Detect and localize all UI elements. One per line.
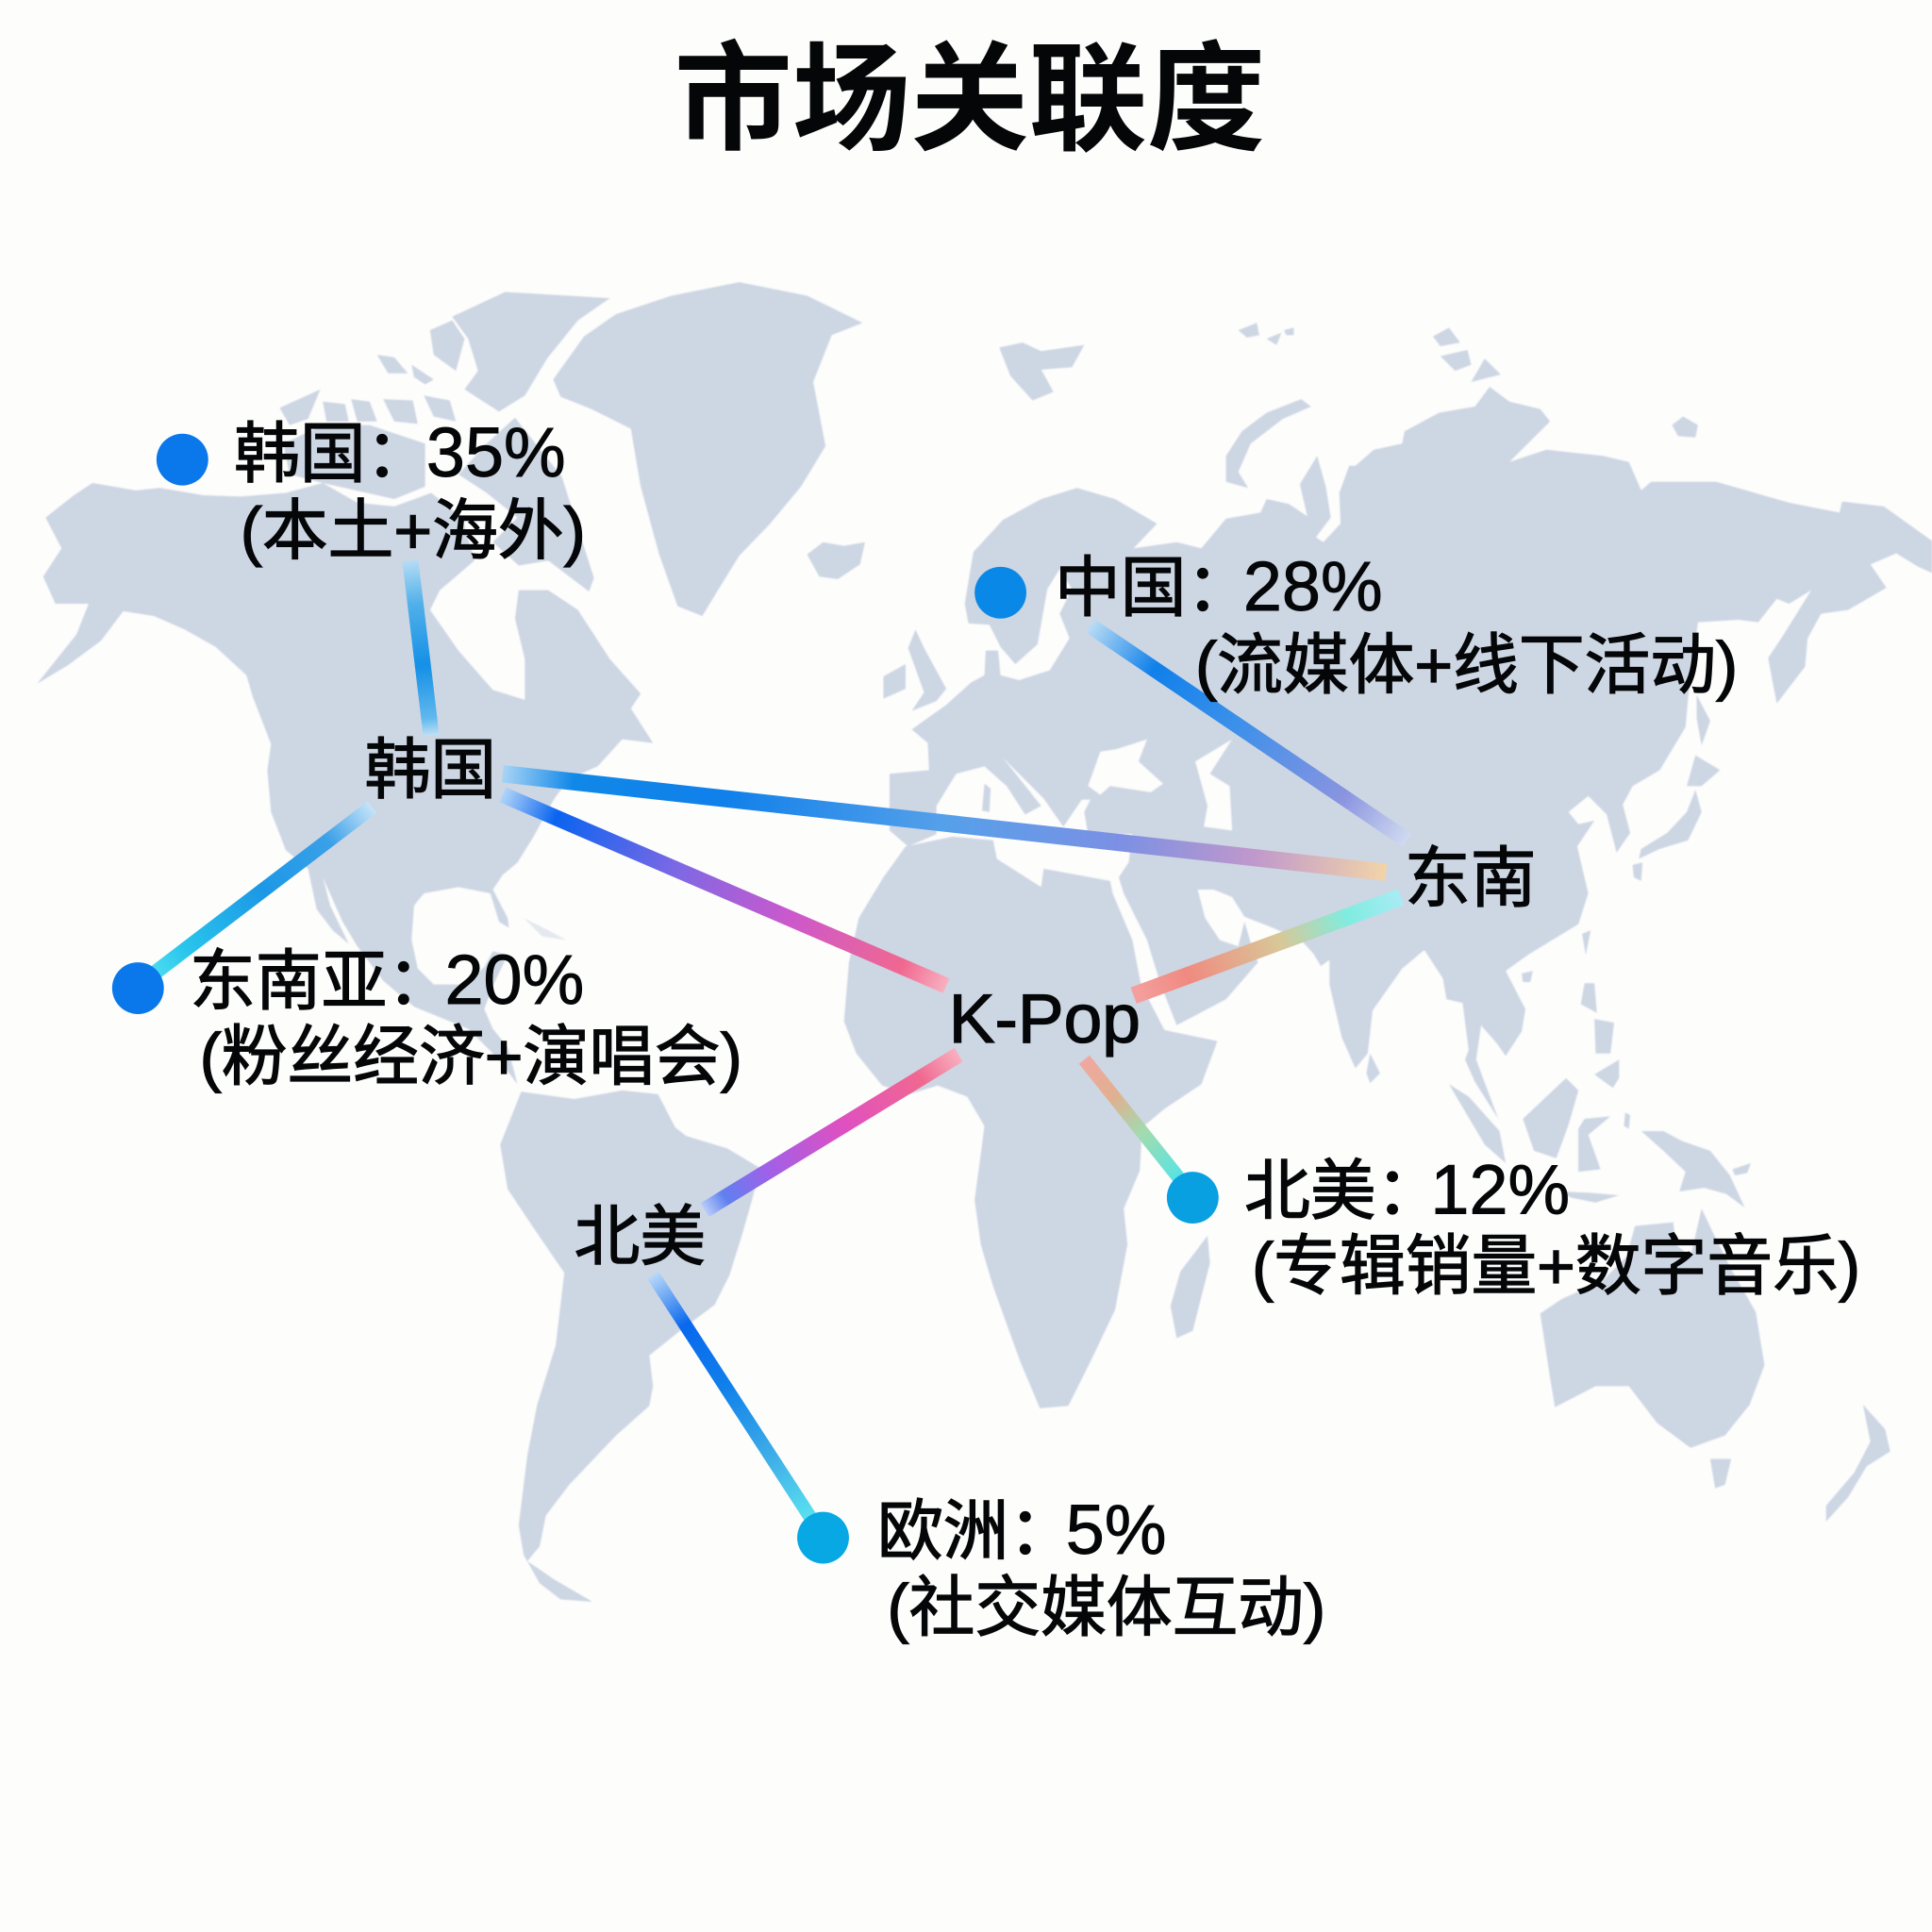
label: Korea 35% — [234, 413, 586, 567]
dot: China — [974, 567, 1026, 619]
map: Arctic islands group — [279, 355, 456, 499]
map: Great Britain — [908, 629, 946, 711]
map: Severnaya Zemlya — [1433, 327, 1501, 382]
label: China 28%: 中国： — [1055, 551, 1252, 625]
map: Hokkaido — [1687, 756, 1720, 786]
label: North America 12%: 北美： — [1244, 1155, 1441, 1228]
map: Tasmania — [1710, 1458, 1731, 1489]
map: Kyushu — [1633, 862, 1642, 881]
map: Africa — [844, 837, 1217, 1408]
connector: K-Pop to North America node — [705, 1055, 958, 1210]
map: Devon Island — [430, 321, 464, 371]
connector: K-Pop to North America dot — [1084, 1059, 1183, 1183]
connector: Korea node to K-Pop — [503, 794, 946, 986]
connector: K-Pop to Dongnan node — [1134, 897, 1401, 995]
map: New Zealand — [1826, 1405, 1890, 1522]
label: Korea 35%: (本土+海外) — [241, 493, 586, 567]
map: inland seas — [1088, 740, 1232, 830]
map: Ellesmere Island — [452, 292, 610, 411]
dot: Southeast Asia — [112, 962, 164, 1014]
map: Java and lesser islands — [1560, 1191, 1619, 1203]
dot: Korea — [157, 434, 208, 486]
label: Korea 35%: 韩国： — [234, 417, 431, 491]
map: Sumatra — [1449, 1084, 1506, 1163]
map: South America — [500, 1091, 760, 1602]
label: Korea 35%: 35% — [426, 413, 566, 491]
map: Honshu — [1639, 790, 1702, 858]
map: Ireland — [883, 664, 906, 699]
map: New Guinea — [1641, 1131, 1744, 1208]
label: Europe 5%: (社交媒体互动) — [887, 1571, 1325, 1644]
label: North America 12%: 12% — [1430, 1151, 1570, 1229]
world map — [37, 282, 1932, 1602]
label: China 28%: (流媒体+线下活动) — [1195, 628, 1738, 702]
map: Madagascar — [1171, 1236, 1210, 1338]
label: Europe 5% — [877, 1491, 1325, 1644]
map: Eurasia — [890, 387, 1932, 1119]
dot: North America — [1167, 1172, 1219, 1224]
dot: Europe — [797, 1512, 849, 1563]
map: Sri Lanka — [1366, 1054, 1380, 1083]
connector: Korea node to Dongnan node — [503, 774, 1386, 873]
node: North America: 北美 — [575, 1200, 706, 1274]
map: New Britain — [1732, 1163, 1751, 1175]
label: China 28%: 28% — [1243, 547, 1383, 625]
label: Europe 5%: 5% — [1066, 1491, 1166, 1569]
map: Taiwan — [1582, 930, 1591, 955]
map: Australia — [1541, 1208, 1764, 1448]
node: Korea: 韩国 — [365, 733, 496, 807]
map: Svalbard — [999, 342, 1084, 400]
map: New Siberian islands — [1672, 416, 1698, 438]
label: North America 12%: (专辑销量+数字音乐) — [1252, 1229, 1860, 1303]
map: Baffin Island — [458, 418, 594, 591]
map: Sakhalin — [1697, 695, 1710, 745]
label: North America 12% — [1244, 1151, 1860, 1303]
map: Hainan — [1522, 971, 1533, 982]
label: Southeast Asia 20%: 20% — [445, 941, 584, 1019]
node: K-Pop: K-Pop — [949, 981, 1141, 1058]
label: Southeast Asia 20%: (粉丝经济+演唱会) — [200, 1020, 742, 1093]
connector: Korea node to Korea label — [410, 560, 431, 736]
map: Corsica and Sardinia — [982, 784, 991, 812]
label: Europe 5%: 欧洲： — [877, 1494, 1074, 1568]
map: Franz Josef Land — [1239, 323, 1293, 345]
map: Halmahera — [1624, 1112, 1630, 1128]
map: Greenland — [553, 282, 862, 616]
node: Dongnan: 东南 — [1405, 841, 1536, 915]
connector: China label to Dongnan node — [1091, 626, 1407, 841]
label: Southeast Asia 20% — [190, 941, 742, 1093]
map: Borneo — [1523, 1078, 1578, 1158]
connector: Korea node to Southeast Asia dot — [154, 808, 372, 974]
map: Sulawesi — [1578, 1116, 1610, 1172]
title: 市场关联度 — [674, 33, 1265, 166]
map: Novaya Zemlya — [1226, 399, 1311, 488]
label: Southeast Asia 20%: 东南亚： — [190, 944, 453, 1018]
map: Iceland — [808, 542, 865, 579]
map: Cuba — [524, 918, 567, 941]
label: China 28% — [1055, 547, 1738, 702]
connector: North America node to Europe dot — [653, 1275, 813, 1522]
map: Philippines — [1581, 983, 1619, 1088]
map: North America — [37, 483, 653, 1084]
